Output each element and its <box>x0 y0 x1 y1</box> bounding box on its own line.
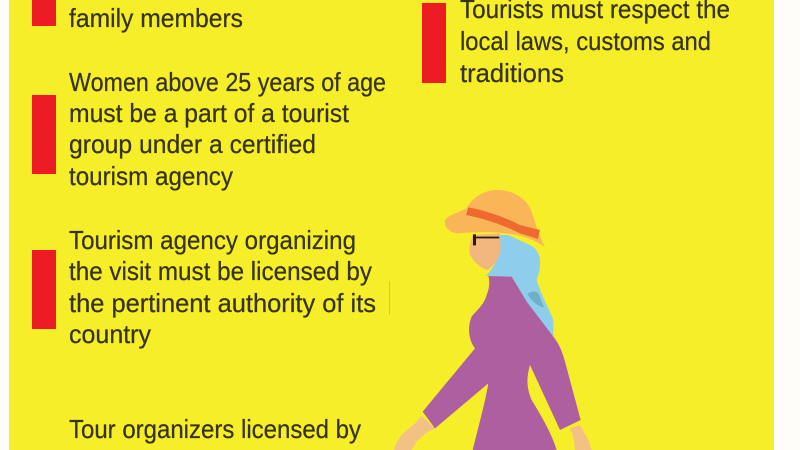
faint vertical scan mark <box>389 281 390 315</box>
hat band <box>466 207 540 239</box>
sun hat <box>445 190 545 247</box>
rule: women above 25: group under a certified <box>69 129 316 159</box>
rule: women above 25: must be a part of a tourist <box>69 98 350 128</box>
rule: women above 25 <box>32 67 386 191</box>
dress <box>423 276 581 450</box>
rule: family members: family members <box>69 3 243 33</box>
glasses <box>473 234 499 245</box>
rule: women above 25: Women above 25 years of age <box>69 67 386 97</box>
rule: respect local laws: traditions <box>460 58 564 88</box>
rule: respect local laws: local laws, customs and <box>460 26 711 56</box>
scarf shadow <box>527 291 544 307</box>
rule: licensed agency <box>32 225 376 349</box>
face <box>469 233 502 270</box>
left hand <box>394 416 435 450</box>
rule: licensed agency: Tourism agency organizing <box>69 225 356 255</box>
right hand <box>570 425 592 450</box>
rule: women above 25: tourism agency <box>69 161 233 191</box>
illustration: walking woman tourist <box>394 190 592 450</box>
rule: respect local laws <box>422 0 730 88</box>
rule: licensed agency: country <box>69 319 151 349</box>
rule: licensed agency: the visit must be licensed by <box>69 256 372 286</box>
headscarf <box>486 235 553 337</box>
rule: tour organizers: Tour organizers licensed by <box>69 414 361 444</box>
rule: licensed agency: the pertinent authority of its <box>69 288 376 318</box>
